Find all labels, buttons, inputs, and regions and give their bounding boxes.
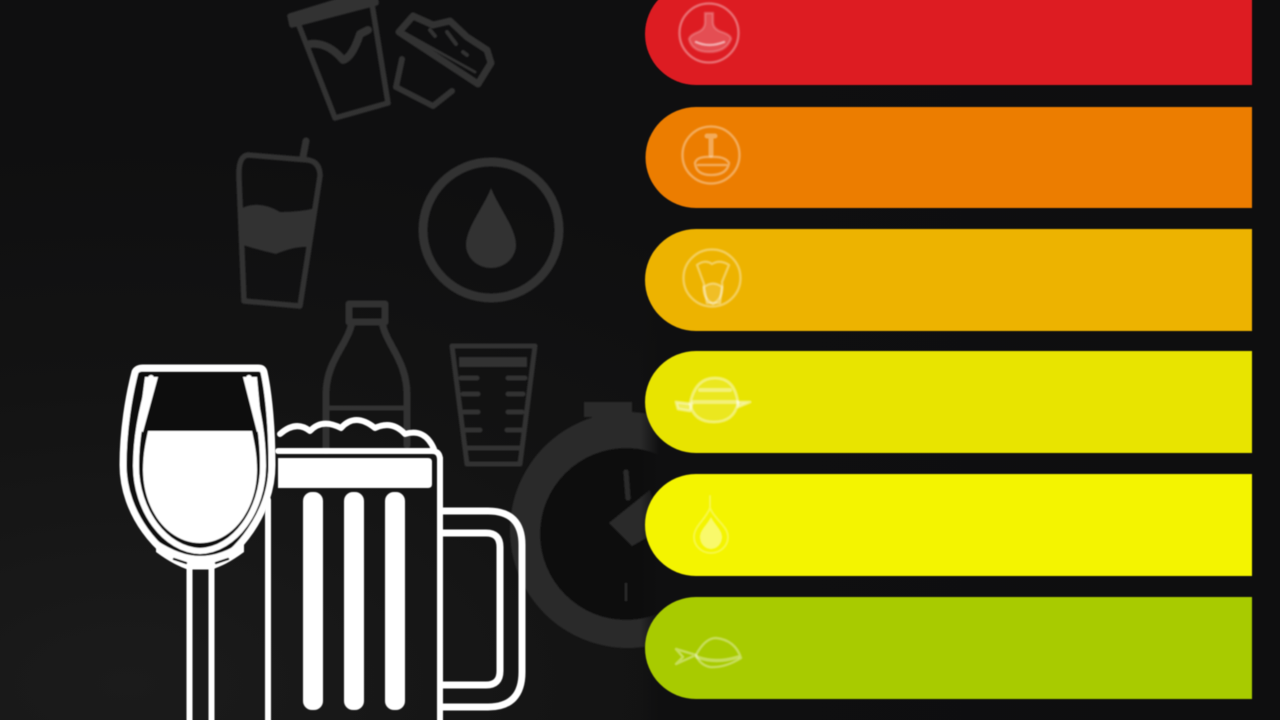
icon: bottle bbox=[326, 304, 407, 450]
icon: decanter in circle bbox=[680, 4, 738, 62]
icon: stopwatch bbox=[510, 402, 746, 648]
stem joint slits bbox=[174, 559, 228, 563]
icon: beer mug bbox=[268, 420, 522, 720]
foam bbox=[280, 420, 434, 449]
mug body bbox=[268, 458, 440, 720]
mug rim bbox=[278, 451, 440, 460]
glass bowl outline bbox=[123, 368, 272, 566]
icon: foam cup in circle bbox=[684, 250, 740, 306]
icon: goblet in circle bbox=[682, 126, 740, 184]
icon: wine glass bbox=[123, 368, 272, 720]
glass rim highlight wedges bbox=[138, 377, 262, 432]
glass inner highlight band bbox=[136, 378, 263, 551]
bar: amber bbox=[645, 229, 1252, 331]
bar: green bbox=[645, 597, 1252, 699]
glass stem bbox=[190, 566, 212, 720]
bar: yellow bbox=[645, 474, 1252, 576]
wine bbox=[143, 431, 257, 543]
icon: tilted sandwich box bbox=[396, 16, 491, 106]
icon: covered dish bbox=[676, 378, 750, 422]
icon: cup with straw bbox=[239, 141, 320, 306]
icon: fish bbox=[676, 638, 741, 667]
ghost drink icons bbox=[239, 0, 746, 648]
dark bar backdrop bbox=[640, 0, 1280, 720]
mug handle bbox=[443, 511, 522, 707]
icon: tilted takeaway cup bbox=[290, 0, 388, 118]
bar: orange bbox=[646, 107, 1252, 208]
glass stem joint bbox=[156, 540, 244, 569]
energy-label bars bbox=[645, 0, 1252, 699]
mug head band bbox=[278, 458, 432, 488]
bar: lime yellow bbox=[645, 351, 1252, 453]
icon: drop in circle bbox=[423, 162, 559, 298]
icon: striped tumbler bbox=[452, 346, 535, 464]
bar icons bbox=[676, 4, 750, 667]
bar: red bbox=[645, 0, 1252, 85]
mug stripes bbox=[303, 492, 405, 710]
icon: oil drop bbox=[694, 496, 728, 553]
